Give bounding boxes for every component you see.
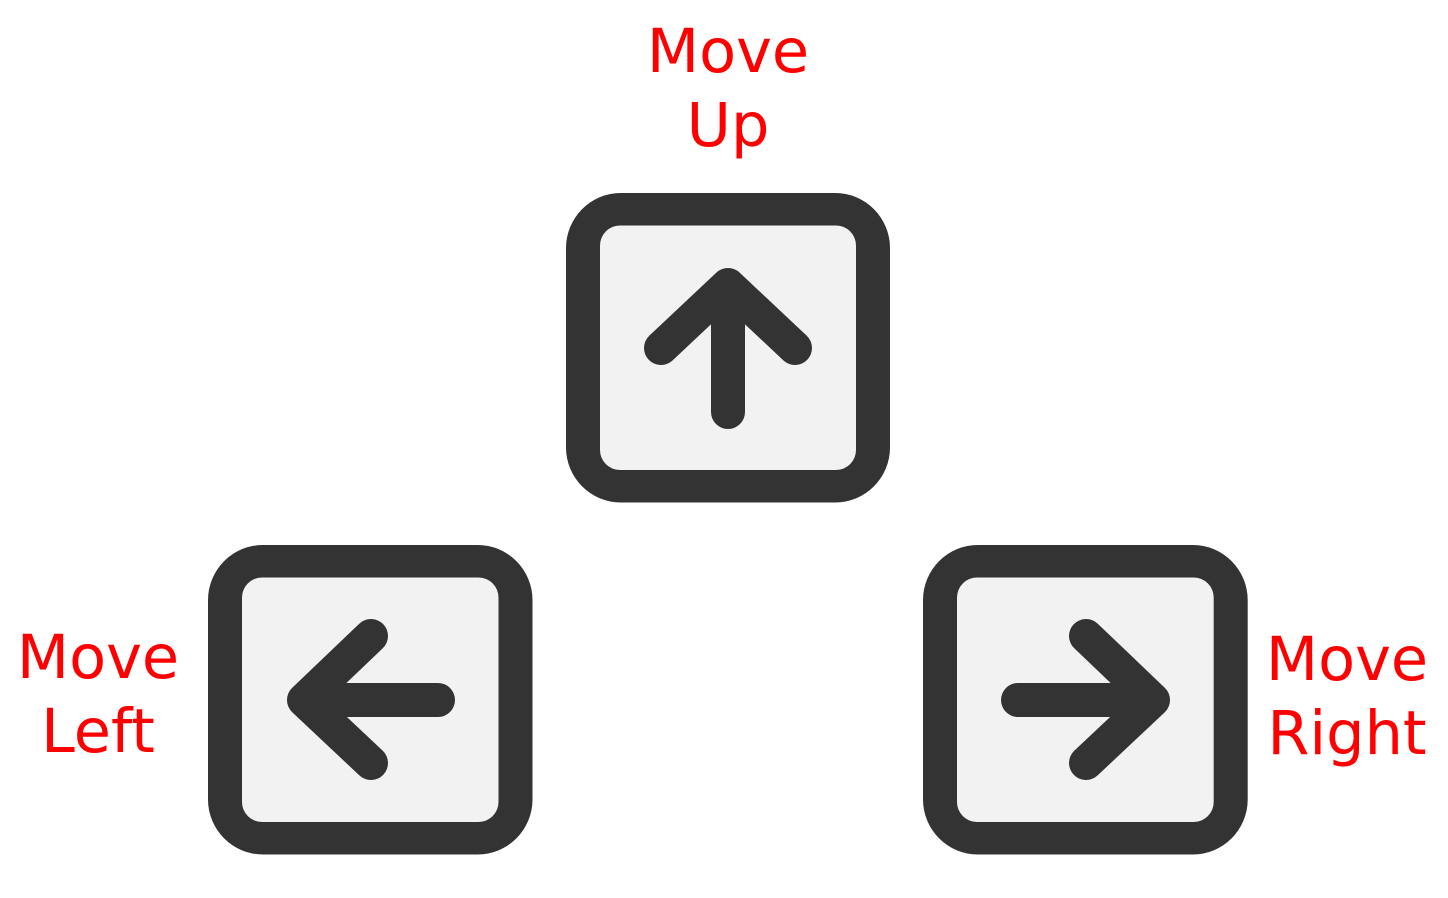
key: right arrow <box>923 545 1248 854</box>
label: move left: Left <box>41 697 155 767</box>
label: move up: Up <box>687 91 769 161</box>
label: move right: Move <box>1266 625 1428 695</box>
label: move right <box>1266 625 1428 769</box>
label: move up: Move <box>647 17 809 87</box>
key: left arrow <box>208 545 532 854</box>
label: move right: Right <box>1267 699 1427 769</box>
label: move left <box>17 623 179 767</box>
label: move left: Move <box>17 623 179 693</box>
label: move up <box>647 17 809 161</box>
key: up arrow <box>566 193 890 502</box>
